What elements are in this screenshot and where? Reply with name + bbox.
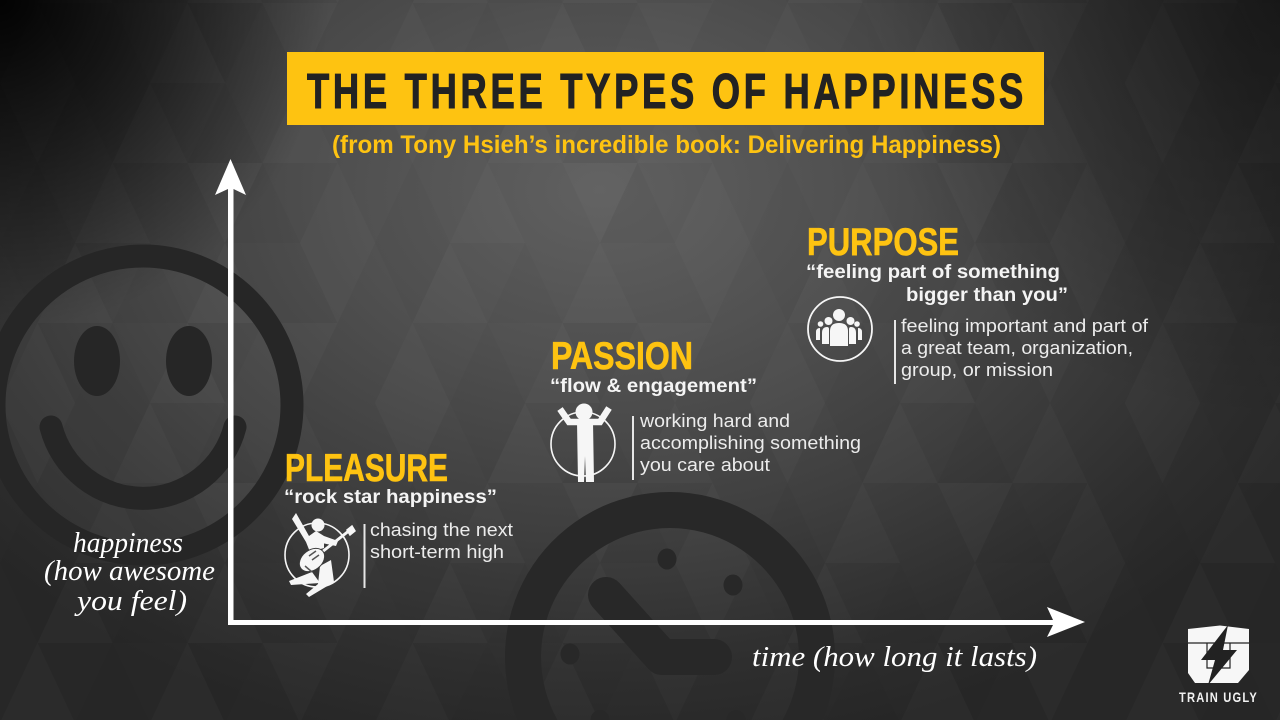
description: pleasure (370, 520, 513, 562)
title banner (287, 52, 1044, 125)
description: pleasure: short-term high (370, 542, 504, 562)
panel: pleasure (284, 447, 513, 597)
axis label: happiness: (how awesome (44, 556, 215, 587)
icon: background clock (505, 492, 835, 720)
icon: group of people (808, 297, 872, 361)
description: purpose: a great team, organization, (901, 338, 1133, 358)
panel: passion (550, 335, 861, 482)
quote: feeling part of something bigger: bigger than you” (906, 285, 1068, 306)
quote: feeling part of something bigger: “feeling part of something (806, 262, 1060, 283)
description: passion (639, 411, 861, 475)
description: purpose (901, 316, 1149, 380)
description: pleasure: chasing the next (370, 520, 513, 540)
divider (632, 416, 634, 480)
arrow: vertical happiness axis (215, 159, 246, 620)
description: purpose: group, or mission (901, 360, 1053, 380)
icon: background smiley face (0, 256, 292, 554)
quote: feeling part of something bigger (806, 262, 1068, 306)
icon: shield with lightning bolt (1188, 625, 1249, 685)
quote: rock star happiness: “rock star happiness” (284, 487, 497, 508)
heading: passion: PASSION (551, 335, 693, 378)
subtitle: (from Tony Hsieh’s incredible book: Delivering Happiness) (332, 131, 1001, 159)
axis label: happiness (44, 528, 215, 617)
panel: purpose (806, 221, 1149, 384)
description: passion: you care about (640, 455, 770, 475)
logo wordmark: TRAIN UGLY (1179, 689, 1258, 705)
axis label: happiness: happiness (73, 528, 183, 559)
heading: pleasure: PLEASURE (285, 447, 448, 490)
icon: person with arms raised (551, 404, 615, 482)
axis label: time: time (how long it lasts) (752, 642, 1037, 673)
arrow: horizontal time axis (228, 607, 1085, 637)
chart axes (215, 159, 1085, 637)
title banner: THE THREE TYPES OF HAPPINESS (307, 65, 1027, 119)
description: purpose: feeling important and part of (901, 316, 1149, 336)
heading: purpose: PURPOSE (807, 221, 959, 264)
axis label: happiness: you feel) (74, 586, 187, 617)
icon: rock star guitarist (285, 513, 355, 597)
logo: train ugly (1179, 625, 1258, 705)
divider (894, 320, 896, 384)
description: passion: working hard and (639, 411, 790, 431)
description: passion: accomplishing something (640, 433, 861, 453)
divider (364, 524, 366, 588)
quote: flow and engagement: “flow & engagement” (550, 376, 757, 397)
